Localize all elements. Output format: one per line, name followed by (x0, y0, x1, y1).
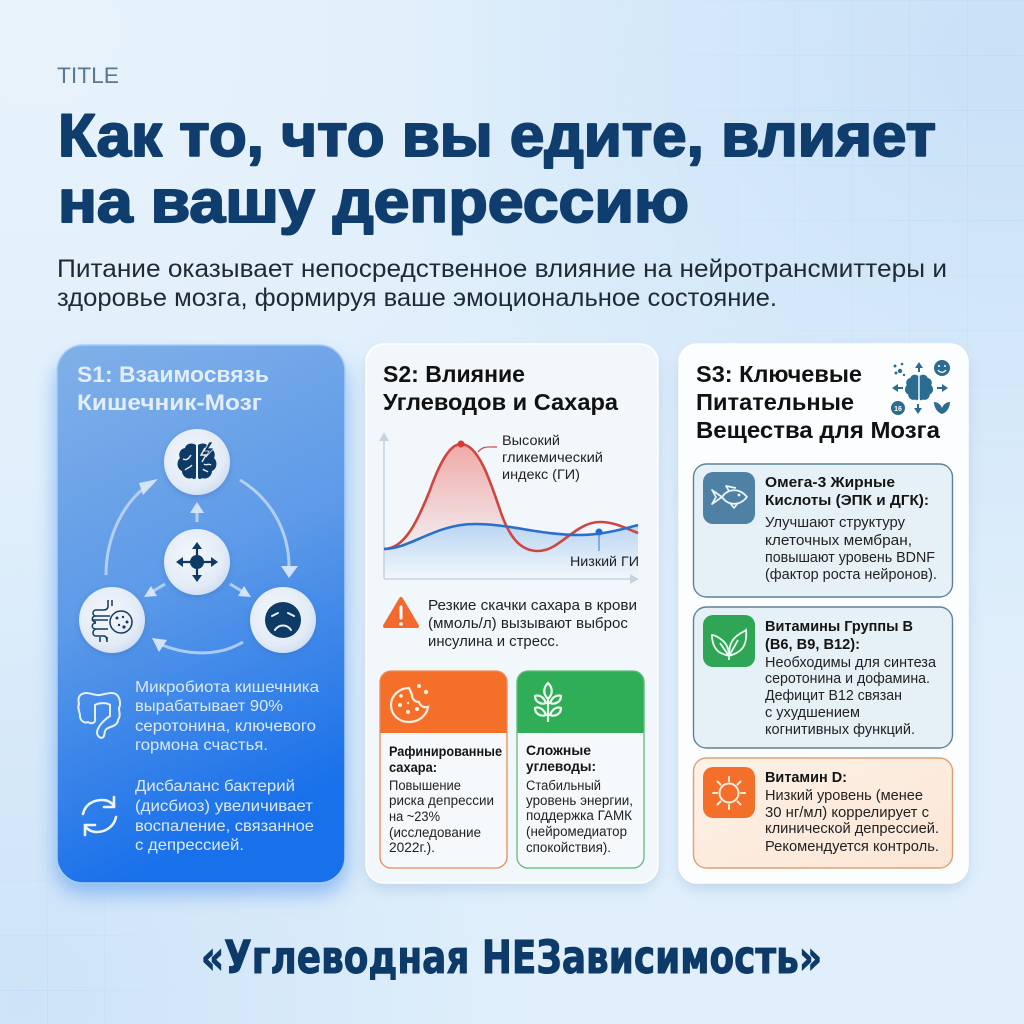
text: microbiota: вырабатывает 90% (135, 698, 283, 715)
S1 heading: Кишечник-Мозг (77, 390, 262, 415)
refined sugars text: (исследование (389, 825, 481, 840)
icon: wheat (535, 683, 561, 722)
complex carbs text: углеводы: (526, 759, 596, 774)
text: microbiota (135, 679, 319, 754)
vitamin D text: Низкий уровень (менее (765, 787, 923, 804)
high GI label: Высокий (502, 433, 560, 448)
complex carbs text: (нейромедиатор (526, 824, 627, 839)
text: dysbiosis: с депрессией. (135, 837, 244, 854)
vitamin D text: 30 нг/мл) коррелирует с (765, 804, 929, 821)
complex carbs text: Сложные (526, 743, 592, 758)
text: dysbiosis: Дисбаланс бактерий (135, 778, 295, 795)
vitamin B text: с ухудшением (765, 704, 860, 721)
refined sugars text: Рафинированные (389, 744, 502, 759)
refined sugars text: Повышение (389, 778, 461, 793)
omega-3 text: Улучшают структуру (765, 514, 905, 531)
footer brand: «Углеводная НЕЗависимость» (201, 931, 822, 984)
gut microbiome node (79, 587, 145, 653)
icon: sun (703, 767, 755, 818)
refined sugars text: на ~23% (389, 809, 440, 824)
text: microbiota: серотонина, ключевого (135, 718, 316, 735)
icon: fish (703, 472, 755, 524)
omega-3 text: клеточных мембран, (765, 532, 912, 549)
text: microbiota: гормона счастья. (135, 737, 268, 754)
S2 heading: Углеводов и Сахара (383, 389, 618, 415)
S1 heading: S1: Взаимосвязь (77, 362, 269, 387)
icon: cycle arrows (83, 797, 116, 835)
high GI label: гликемический (502, 450, 603, 465)
complex carbs text: поддержка ГАМК (526, 808, 632, 823)
S2 heading (383, 361, 618, 415)
S3 heading: Питательные (696, 389, 854, 415)
omega-3 text: (фактор роста нейронов). (765, 566, 937, 583)
vitamin D text (765, 770, 939, 855)
refined sugars text: 2022г.). (389, 840, 435, 855)
subtitle (57, 255, 947, 312)
icon: cookie (391, 684, 428, 722)
S2 heading: S2: Влияние (383, 361, 525, 387)
vitamin D text: клинической депрессией. (765, 820, 939, 837)
warning text (428, 597, 637, 650)
vitamin D text: Витамин D: (765, 770, 847, 786)
complex carbs text: уровень энергии, (526, 793, 633, 808)
subtitle: здоровье мозга, формируя ваше эмоциональное состояние. (57, 284, 777, 312)
high GI label (502, 433, 603, 482)
icon cluster: brain and nutrients: 16 (894, 406, 902, 413)
warning text: инсулина и стресс. (428, 633, 559, 650)
icon: leaves (703, 615, 755, 667)
omega-3 text: Омега-3 Жирные (765, 475, 895, 491)
text: dysbiosis (135, 778, 314, 854)
high GI label: индекс (ГИ) (502, 467, 580, 482)
card: complex carbs (517, 671, 644, 868)
nutrient: omega-3 (694, 464, 952, 597)
omega-3 text: повышают уровень BDNF (765, 549, 935, 566)
text: dysbiosis: (дисбиоз) увеличивает (135, 798, 314, 815)
eyebrow label: TITLE (57, 63, 119, 88)
panel: S2 carbs and sugar (366, 344, 658, 889)
sad face node (250, 587, 316, 653)
vitamin D text: Рекомендуется контроль. (765, 838, 939, 855)
low GI label: Низкий ГИ (570, 554, 639, 569)
refined sugars text: сахара: (389, 760, 437, 775)
S1 heading (77, 362, 269, 415)
text: microbiota: Микробиота кишечника (135, 679, 319, 696)
brain node (164, 429, 230, 495)
omega-3 text: Кислоты (ЭПК и ДГК): (765, 493, 929, 509)
nutrient: vitamin D (694, 758, 952, 868)
omega-3 text (765, 475, 937, 583)
text: dysbiosis: воспаление, связанное (135, 818, 314, 835)
vitamin B text: когнитивных функций. (765, 721, 915, 738)
complex carbs text (526, 743, 633, 855)
nutrient: vitamin B (694, 607, 952, 748)
vitamin B text (765, 619, 937, 738)
icon: intestine (78, 693, 120, 738)
S3 heading: Вещества для Мозга (696, 417, 940, 443)
icon: warning (385, 599, 417, 626)
vitamin B text: (B6, B9, B12): (765, 637, 860, 653)
S3 heading (696, 361, 940, 443)
complex carbs text: спокойствия). (526, 840, 611, 855)
refined sugars text (389, 744, 502, 855)
title: Как то, что вы едите, влияет (58, 102, 936, 169)
S3 heading: S3: Ключевые (696, 361, 862, 387)
cycle arrows (106, 479, 298, 653)
subtitle: Питание оказывает непосредственное влияние на нейротрансмиттеры и (57, 255, 947, 283)
vitamin B text: Необходимы для синтеза (765, 654, 937, 671)
vitamin B text: серотонина и дофамина. (765, 670, 930, 687)
vitamin B text: Витамины Группы B (765, 619, 913, 635)
central hub node (164, 529, 230, 595)
refined sugars text: риска депрессии (389, 793, 494, 808)
title: на вашу депрессию (58, 168, 689, 235)
icon cluster: brain and nutrients (891, 360, 950, 415)
panel: S3 key nutrients (679, 344, 968, 889)
complex carbs text: Стабильный (526, 778, 601, 793)
warning text: (ммоль/л) вызывают выброс (428, 615, 628, 632)
card: refined sugars (380, 671, 507, 868)
warning text: Резкие скачки сахара в крови (428, 597, 637, 614)
vitamin B text: Дефицит B12 связан (765, 687, 902, 704)
panel: S1 gut-brain (55, 345, 347, 894)
glycemic chart (379, 432, 639, 584)
title (58, 102, 936, 235)
